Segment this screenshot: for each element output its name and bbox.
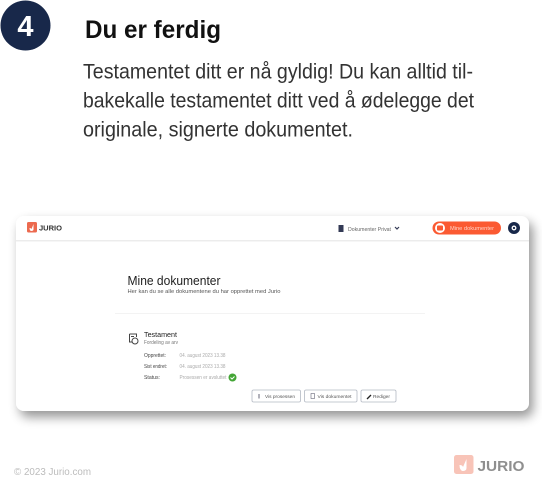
action buttons	[252, 390, 396, 402]
body text	[83, 60, 474, 142]
icon: completed badge	[228, 374, 236, 382]
heading: Du er ferdig	[85, 16, 221, 44]
page heading: Mine dokumenter	[128, 274, 220, 288]
panel: document screenshot	[16, 216, 529, 411]
created: Opprettet:	[144, 353, 166, 359]
last changed	[144, 364, 226, 370]
button: Vis dokumentet	[304, 390, 357, 402]
logo: Jurio footer: JURIO	[478, 459, 524, 475]
section divider	[115, 313, 425, 314]
body text: originale, signerte dokumentet.	[83, 118, 353, 142]
document row	[130, 332, 236, 382]
document selector: Dokumenter Privat	[348, 227, 391, 233]
icon: settings	[508, 222, 520, 234]
header divider	[16, 240, 529, 242]
icon: document	[130, 334, 138, 344]
step number badge: 4	[17, 11, 34, 43]
status: Status:	[144, 375, 160, 381]
document selector	[338, 225, 399, 233]
status	[144, 375, 227, 381]
button: Rediger: Rediger	[373, 394, 390, 400]
button: Vis dokumentet: Vis dokumentet	[318, 394, 352, 400]
button: Vis prosessen: Vis prosessen	[265, 394, 295, 400]
step number badge	[0, 0, 50, 50]
body text: Testamentet ditt er nå gyldig! Du kan alltid til-	[83, 60, 473, 84]
created	[144, 353, 226, 359]
button: Vis prosessen	[252, 390, 300, 402]
status: Prosessen er avsluttet	[180, 375, 227, 381]
document subtitle: Fordeling av arv	[144, 340, 178, 346]
document title: Testament	[144, 332, 177, 339]
copyright: © 2023 Jurio.com	[14, 467, 91, 478]
button: Rediger	[361, 390, 396, 402]
logo: Jurio app header	[27, 222, 62, 232]
button: Mine dokumenter	[432, 222, 501, 234]
logo: Jurio app header: JURIO	[39, 224, 62, 232]
body text: bakekalle testamentet ditt ved å ødelegge det	[83, 90, 474, 112]
logo: Jurio footer	[454, 455, 524, 475]
last changed: Sist endret:	[144, 364, 167, 370]
created: 04. august 2023 13.38	[180, 353, 226, 359]
last changed: 04. august 2023 13.38	[180, 364, 226, 370]
page subheading: Her kan du se alle dokumentene du har opprettet med Jurio	[128, 289, 280, 295]
card background	[16, 216, 529, 411]
button: Mine dokumenter: Mine dokumenter	[450, 226, 494, 232]
